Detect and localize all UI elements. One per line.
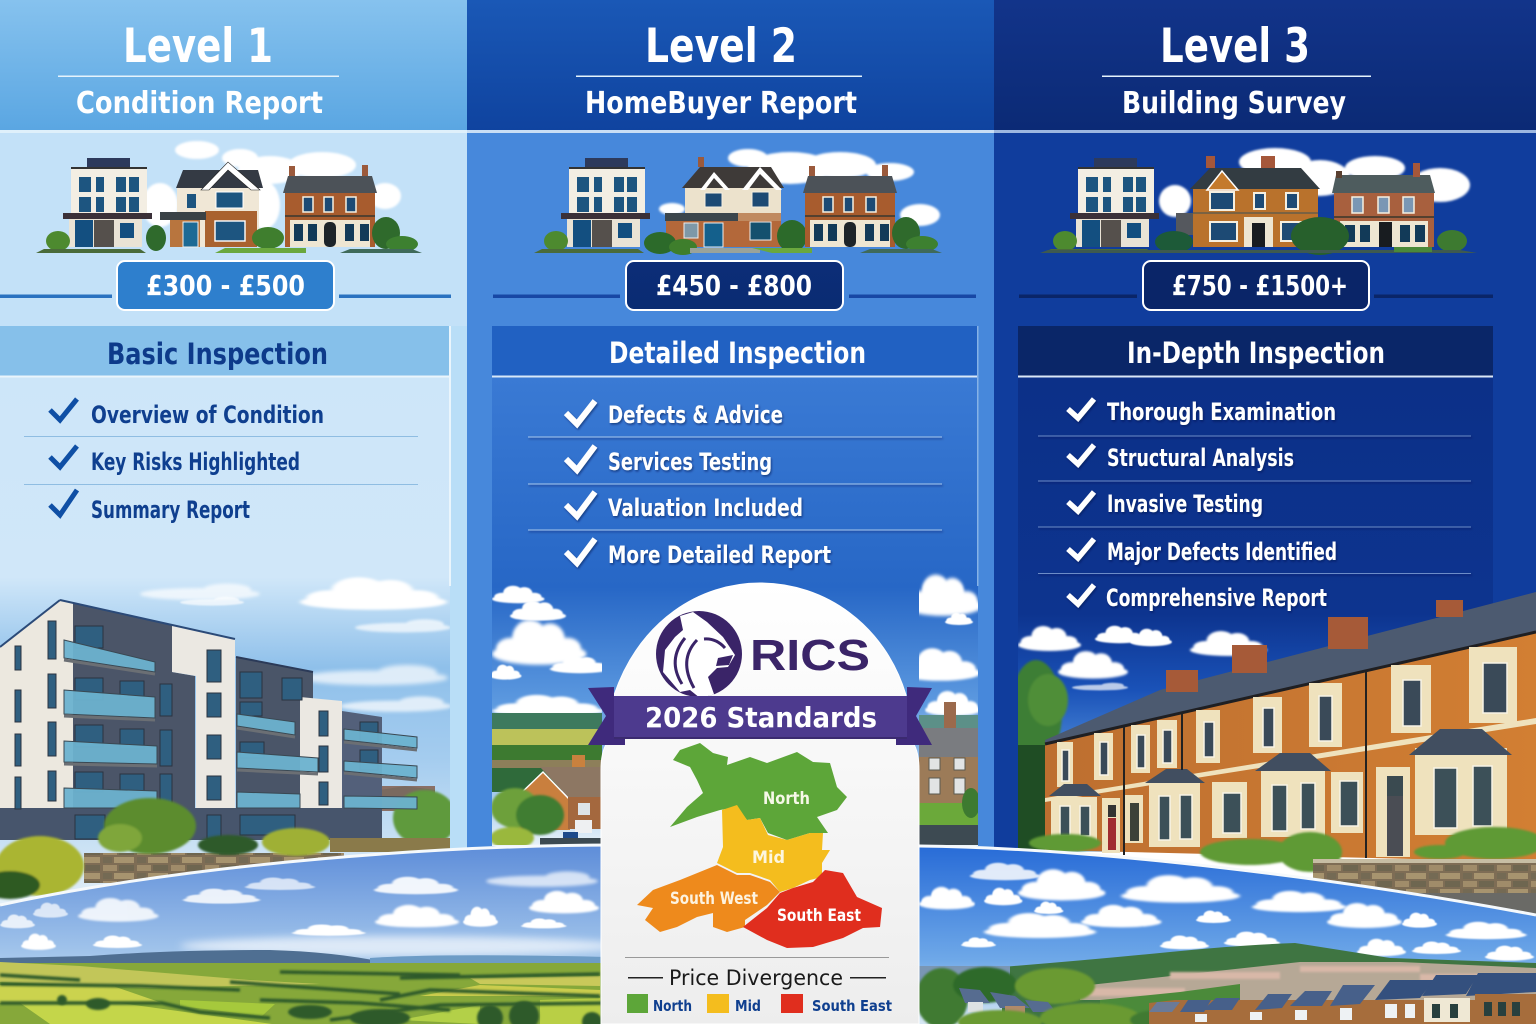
subtitle: condition report: Condition Report	[76, 86, 323, 121]
price line: level 1	[0, 294, 451, 298]
checklist: level 3: Major Defects Identified	[1107, 538, 1337, 566]
houses: level 2	[534, 149, 942, 255]
map: south east	[743, 870, 882, 948]
checklist: level 1: Key Risks Highlighted	[91, 448, 300, 476]
column 1 background	[0, 132, 467, 906]
title: level 2: Level 2	[645, 19, 797, 74]
rics logo: RICS	[750, 631, 870, 680]
checklist: level 3: Invasive Testing	[1107, 490, 1263, 518]
ribbon	[588, 687, 932, 745]
legend: price divergence: North	[653, 997, 692, 1015]
houses: level 1	[36, 141, 422, 253]
header: level 3	[994, 0, 1536, 133]
panel heading: basic inspection: Basic Inspection	[107, 337, 328, 371]
panel heading: basic inspection	[0, 326, 451, 586]
price badge: level 2	[626, 261, 843, 310]
price badge: level 1	[117, 261, 334, 310]
map: mid: Mid	[752, 848, 785, 868]
checklist: level 2: Services Testing	[608, 448, 772, 476]
legend: price divergence: Price Divergence	[669, 966, 843, 990]
column 3 background	[994, 132, 1536, 852]
map: mid	[717, 805, 830, 892]
legend: price divergence: South East	[812, 997, 892, 1015]
scene: apartment building	[0, 577, 457, 899]
panel heading: in-depth inspection: In-Depth Inspection	[1127, 336, 1385, 370]
card background	[601, 583, 919, 1024]
checklist: level 1: Summary Report	[91, 496, 250, 524]
clouds and fields	[0, 863, 1536, 1024]
map: south west: South West	[670, 889, 758, 909]
central card: rics standards	[588, 583, 932, 1024]
checklist: level 2: Defects & Advice	[608, 401, 783, 429]
legend: price divergence	[625, 957, 892, 1015]
map: south east: South East	[777, 906, 861, 926]
checklist: level 2: Valuation Included	[608, 494, 803, 522]
price badge: level 3	[1143, 261, 1369, 310]
title: level 1: Level 1	[123, 19, 273, 74]
title: level 3: Level 3	[1160, 19, 1310, 74]
price badge: level 1: £300 - £500	[146, 269, 305, 302]
map: south west	[637, 865, 780, 932]
ribbon: 2026 Standards	[645, 701, 877, 734]
checklist: level 2: More Detailed Report	[608, 541, 831, 569]
price badge: level 2: £450 - £800	[656, 269, 812, 302]
checklist: level 2	[528, 401, 942, 569]
price line: level 3	[1019, 294, 1493, 298]
bottom landscape band	[0, 840, 1536, 1024]
price line: level 2	[493, 294, 976, 298]
panel heading: in-depth inspection	[1018, 326, 1493, 378]
checklist: level 3: Thorough Examination	[1107, 398, 1336, 426]
checklist: level 3: Structural Analysis	[1107, 444, 1294, 472]
map: north	[670, 743, 847, 840]
header: level 1	[0, 0, 467, 133]
lion head	[663, 612, 735, 698]
map: north: North	[763, 789, 810, 809]
scene: level 2 countryside right	[919, 572, 978, 845]
panel heading: detailed inspection	[492, 326, 978, 586]
checklist: level 1: Overview of Condition	[91, 401, 324, 429]
rics logo	[656, 611, 870, 698]
price badge: level 3: £750 - £1500+	[1172, 269, 1348, 302]
scene: brick terrace	[1010, 592, 1536, 923]
scene: level 2 countryside left	[490, 586, 610, 849]
checklist: level 3: Comprehensive Report	[1106, 584, 1327, 612]
houses: level 3	[1040, 148, 1477, 255]
header: level 2	[467, 0, 994, 133]
subtitle: building survey: Building Survey	[1122, 86, 1346, 121]
panel heading: detailed inspection: Detailed Inspection	[609, 336, 866, 370]
subtitle: homebuyer report: HomeBuyer Report	[585, 86, 857, 121]
checklist: level 3	[1038, 398, 1471, 612]
checklist: level 1	[24, 399, 418, 524]
legend: price divergence: Mid	[735, 997, 761, 1015]
column 2 background	[467, 132, 994, 852]
